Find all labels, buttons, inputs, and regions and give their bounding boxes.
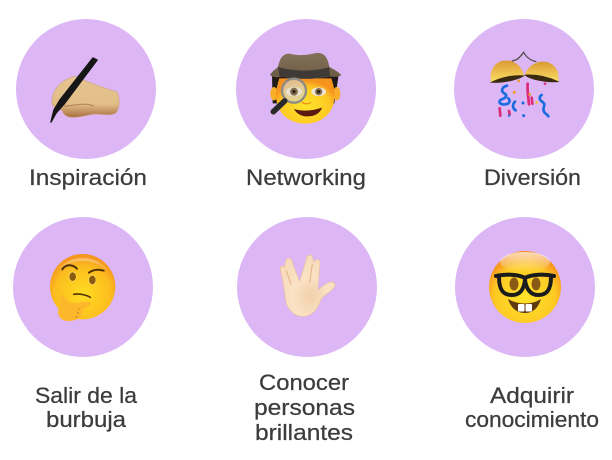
panel: Conocer personas brillantes xyxy=(237,217,377,445)
label: Networking: Networking xyxy=(246,165,366,190)
label: Inspiración: Inspiración xyxy=(29,165,147,190)
icon: nerd face xyxy=(489,251,561,323)
icon: vulcan salute hand xyxy=(280,255,335,316)
circle: Networking xyxy=(236,19,376,159)
circle: Conocer personas brillantes xyxy=(237,217,377,357)
circle: Diversión xyxy=(454,19,594,159)
icon: bells with confetti xyxy=(491,52,559,117)
label: Salir de la burbuja xyxy=(35,383,138,432)
circle: Adquirir conocimiento xyxy=(455,217,595,357)
label: Salir de la burbuja: Salir de la xyxy=(35,383,138,408)
icon: thinking face xyxy=(50,254,115,321)
label: Salir de la burbuja: burbuja xyxy=(46,407,127,432)
panel: Networking xyxy=(236,19,376,190)
label: Diversión: Diversión xyxy=(484,165,581,190)
panel: Diversión xyxy=(454,19,594,190)
panel: Adquirir conocimiento xyxy=(455,217,599,432)
panel: Inspiración xyxy=(16,19,156,190)
label: Conocer personas brillantes: brillantes xyxy=(255,420,353,445)
circle: Inspiración xyxy=(16,19,156,159)
label: Adquirir conocimiento: Adquirir xyxy=(490,383,574,408)
label: Conocer personas brillantes xyxy=(254,370,355,445)
circle: Salir de la burbuja xyxy=(13,217,153,357)
label: Conocer personas brillantes: personas xyxy=(254,395,355,420)
label: Conocer personas brillantes: Conocer xyxy=(259,370,349,395)
label: Adquirir conocimiento: conocimiento xyxy=(465,407,599,432)
icon: writing hand xyxy=(51,58,119,122)
label: Adquirir conocimiento xyxy=(465,383,599,432)
icon: detective xyxy=(270,53,341,124)
panel: Salir de la burbuja xyxy=(13,217,153,432)
